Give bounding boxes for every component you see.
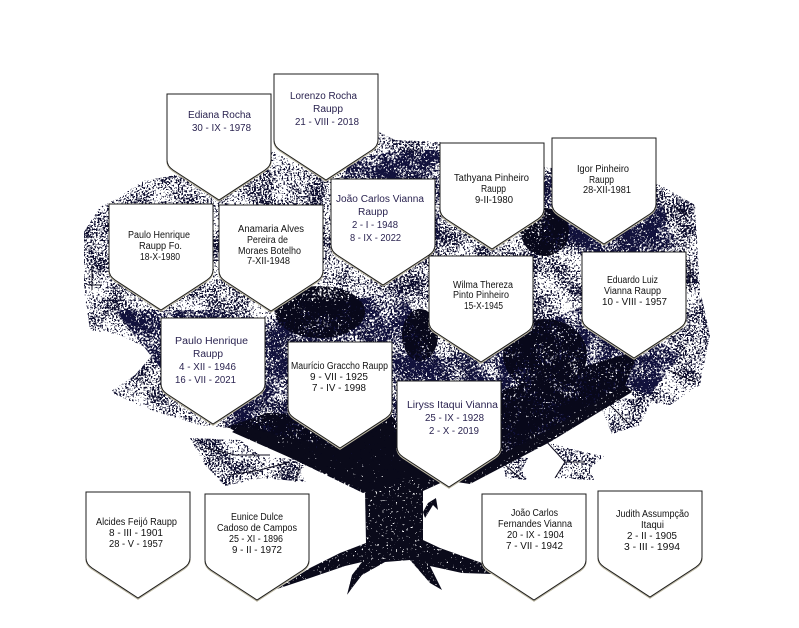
shield: Ediana Rocha (167, 94, 271, 201)
text: Wilma Thereza Pinto Pinheiro: Pinto Pinheiro (453, 290, 509, 301)
text: Lorenzo Rocha Raupp: 21 - VIII - 2018 (295, 117, 359, 128)
text: Eunice Dulce Cadoso de Campos: 9 - II - 1972 (232, 545, 282, 556)
text: João Carlos Vianna Raupp: 8 - IX - 2022 (350, 233, 401, 244)
text: João Carlos Vianna Raupp: João Carlos Vianna (336, 194, 424, 205)
text: Anamaria Alves Pereira de Moraes Botelho: Moraes Botelho (238, 246, 301, 257)
text: Igor Pinheiro Raupp: Raupp (589, 175, 614, 186)
text: Ediana Rocha: 30 - IX - 1978 (192, 123, 251, 134)
text: Wilma Thereza Pinto Pinheiro: Wilma Thereza (453, 280, 513, 291)
text: Alcides Feijó Raupp: Alcides Feijó Raupp (96, 517, 177, 528)
text: Paulo Henrique Raupp: 4 - XII - 1946 (179, 362, 236, 373)
text: Igor Pinheiro Raupp: 28-XII-1981 (583, 185, 631, 196)
text: Paulo Henrique Raupp Fo. (128, 230, 190, 263)
text: Eunice Dulce Cadoso de Campos (217, 512, 297, 556)
text: João Carlos Vianna Raupp (336, 194, 424, 244)
shield: Lorenzo Rocha Raupp (274, 74, 378, 181)
shield: Judith Assumpção Itaqui (598, 491, 702, 598)
text: Alcides Feijó Raupp: 28 - V - 1957 (109, 539, 163, 550)
text: Lorenzo Rocha Raupp (290, 91, 359, 128)
text: Judith Assumpção Itaqui: Itaqui (641, 520, 664, 531)
shield: João Carlos Vianna Raupp (331, 179, 435, 286)
text: Liryss Itaqui Vianna (407, 400, 498, 437)
shield: Anamaria Alves Pereira de Moraes Botelho (219, 205, 323, 312)
text: Anamaria Alves Pereira de Moraes Botelho: Pereira de (247, 235, 288, 246)
text: Anamaria Alves Pereira de Moraes Botelho: Anamaria Alves (238, 224, 304, 235)
text: Anamaria Alves Pereira de Moraes Botelho (238, 224, 304, 267)
text: Eduardo Luiz Vianna Raupp: Eduardo Luiz (607, 275, 658, 286)
text: Eduardo Luiz Vianna Raupp (602, 275, 667, 308)
tree fine branches (88, 205, 695, 482)
shield: Alcides Feijó Raupp (86, 492, 190, 599)
tree canopy dark patches (227, 208, 640, 493)
shield: Tathyana Pinheiro Raupp (440, 143, 544, 250)
text: Eunice Dulce Cadoso de Campos: Cadoso de Campos (217, 523, 297, 534)
text: Ediana Rocha (188, 110, 251, 134)
tree canopy speckle (84, 130, 710, 486)
tree canopy mid shading (115, 150, 680, 480)
text: Liryss Itaqui Vianna: 2 - X - 2019 (429, 426, 479, 437)
text: Eduardo Luiz Vianna Raupp: 10 - VIII - 1957 (602, 297, 667, 308)
text: João Carlos Vianna Raupp: 2 - I - 1948 (352, 220, 398, 231)
text: Eduardo Luiz Vianna Raupp: Vianna Raupp (604, 286, 661, 297)
text: Liryss Itaqui Vianna: 25 - IX - 1928 (425, 413, 484, 424)
text: Eunice Dulce Cadoso de Campos: 25 - XI - 1896 (229, 534, 283, 545)
text: João Carlos Fernandes Vianna: 20 - IX - 1904 (507, 530, 564, 541)
text: João Carlos Vianna Raupp: Raupp (358, 207, 388, 218)
tree trunk and roots (232, 385, 632, 595)
text: Igor Pinheiro Raupp: Igor Pinheiro (577, 164, 629, 175)
shield: Igor Pinheiro Raupp (552, 138, 656, 245)
shield: Paulo Henrique Raupp (161, 318, 265, 425)
text: Ediana Rocha: Ediana Rocha (188, 110, 251, 121)
text: Judith Assumpção Itaqui: Judith Assumpção (616, 509, 689, 520)
text: Wilma Thereza Pinto Pinheiro: 15-X-1945 (464, 301, 503, 312)
text: Igor Pinheiro Raupp (577, 164, 631, 196)
text: Maurício Graccho Raupp (291, 361, 388, 394)
shield: Liryss Itaqui Vianna (397, 381, 501, 488)
text: Eunice Dulce Cadoso de Campos: Eunice Dulce (231, 512, 283, 523)
shield: João Carlos Fernandes Vianna (482, 494, 586, 601)
shield: Maurício Graccho Raupp (288, 342, 392, 449)
text: Anamaria Alves Pereira de Moraes Botelho: 7-XII-1948 (247, 256, 290, 267)
text: João Carlos Fernandes Vianna: 7 - VII - 1942 (506, 541, 563, 552)
text: Maurício Graccho Raupp: Maurício Graccho Raupp (291, 361, 388, 372)
shield: Paulo Henrique Raupp Fo. (109, 204, 213, 311)
text: Tathyana Pinheiro Raupp: Tathyana Pinheiro (454, 173, 529, 184)
text: Paulo Henrique Raupp: Paulo Henrique (175, 336, 248, 347)
shield: Eduardo Luiz Vianna Raupp (582, 252, 686, 359)
text: Paulo Henrique Raupp: 16 - VII - 2021 (175, 375, 236, 386)
text: Alcides Feijó Raupp (96, 517, 177, 550)
text: Wilma Thereza Pinto Pinheiro (453, 280, 513, 312)
text: Judith Assumpção Itaqui: 3 - III - 1994 (624, 542, 680, 553)
shield: Wilma Thereza Pinto Pinheiro (429, 256, 533, 363)
text: Paulo Henrique Raupp: Raupp (193, 349, 223, 360)
tree illustration (84, 130, 710, 595)
text: Tathyana Pinheiro Raupp: 9-II-1980 (475, 195, 513, 206)
text: Judith Assumpção Itaqui (616, 509, 689, 553)
text: Paulo Henrique Raupp Fo.: 18-X-1980 (140, 252, 180, 263)
text: Maurício Graccho Raupp: 9 - VII - 1925 (310, 372, 368, 383)
text: Paulo Henrique Raupp Fo.: Raupp Fo. (139, 241, 182, 252)
text: Paulo Henrique Raupp (175, 336, 248, 386)
text: Tathyana Pinheiro Raupp (454, 173, 529, 206)
shield: Eunice Dulce Cadoso de Campos (205, 494, 309, 601)
text: Tathyana Pinheiro Raupp: Raupp (481, 184, 506, 195)
text: João Carlos Fernandes Vianna (498, 508, 572, 552)
text: João Carlos Fernandes Vianna: João Carlos (511, 508, 558, 519)
text: Lorenzo Rocha Raupp: Lorenzo Rocha (290, 91, 357, 102)
text: Alcides Feijó Raupp: 8 - III - 1901 (109, 528, 163, 539)
text: Paulo Henrique Raupp Fo.: Paulo Henrique (128, 230, 190, 241)
text: João Carlos Fernandes Vianna: Fernandes Vianna (498, 519, 572, 530)
text: Liryss Itaqui Vianna: Liryss Itaqui Vianna (407, 400, 498, 411)
text: Judith Assumpção Itaqui: 2 - II - 1905 (627, 531, 677, 542)
text: Lorenzo Rocha Raupp: Raupp (313, 104, 343, 115)
text: Maurício Graccho Raupp: 7 - IV - 1998 (312, 383, 366, 394)
